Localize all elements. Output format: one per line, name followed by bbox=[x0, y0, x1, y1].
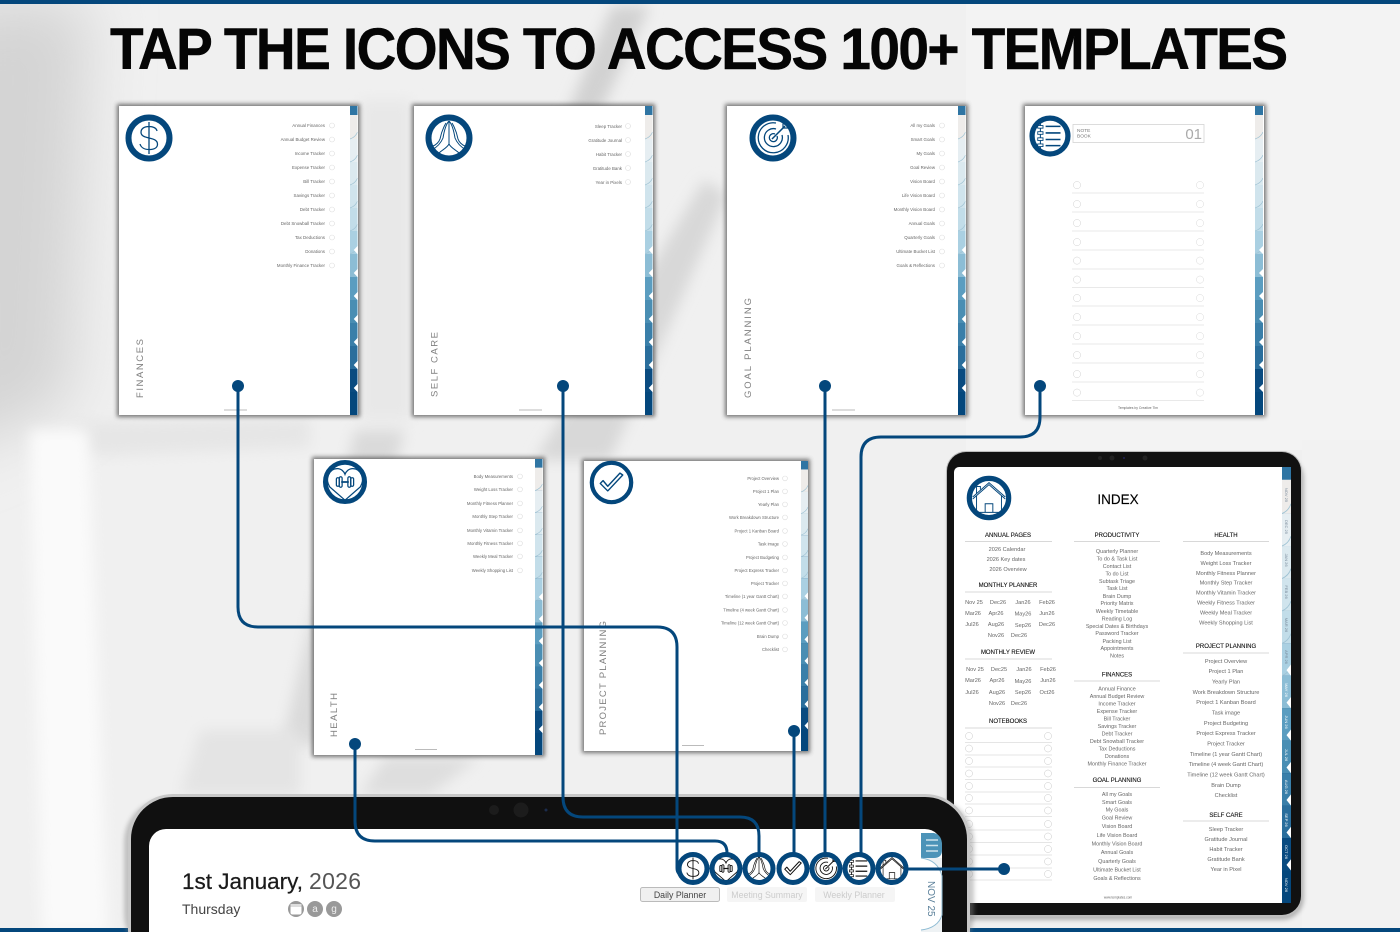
index column: middle: Quarterly Goals bbox=[1098, 859, 1136, 865]
index column: left: MONTHLY PLANNER bbox=[979, 583, 1038, 589]
list: project templates: Checklist bbox=[762, 647, 780, 652]
date icons: g bbox=[331, 904, 337, 915]
index column: middle: Task List bbox=[1107, 586, 1128, 592]
list: goal templates: Goal Review bbox=[910, 165, 936, 170]
index column: left: Jun26 bbox=[1039, 611, 1055, 617]
connector dots bbox=[232, 380, 1046, 875]
index column: middle: Income Tracker bbox=[1098, 702, 1136, 708]
panel: goal planning page bbox=[725, 104, 968, 417]
list: self care templates: Gratitude Journal bbox=[588, 138, 622, 143]
index column: middle: Life Vision Board bbox=[1097, 833, 1137, 839]
index column: middle: Subtask Triage bbox=[1099, 579, 1135, 585]
list: goal templates: Monthly Vision Board bbox=[894, 207, 936, 212]
index column: left: May26 bbox=[1015, 679, 1031, 685]
index column: right: HEALTH bbox=[1214, 533, 1238, 539]
index column: middle: www.templates.com bbox=[1104, 896, 1133, 900]
index column: right: Year in Pixel bbox=[1211, 867, 1241, 873]
connector: home icon to index bbox=[905, 868, 1004, 870]
index column: middle: Password Tracker bbox=[1095, 631, 1139, 637]
vertical heading: finances: FINANCES bbox=[135, 339, 146, 398]
index column: left: Apr26 bbox=[990, 678, 1004, 684]
button: weekly planner: Weekly Planner bbox=[823, 890, 885, 900]
list: project templates: Timeline (12 week Gantt Chart) bbox=[721, 620, 780, 626]
index column: right: Project Tracker bbox=[1207, 742, 1245, 748]
list: health templates: Monthly Fitness Tracker bbox=[467, 541, 514, 546]
index column: left: 2026 Calendar bbox=[989, 547, 1025, 553]
icon: heart dumbbell bbox=[325, 462, 365, 502]
list: goal templates: Quarterly Goals bbox=[904, 235, 936, 240]
index column: middle: Goal Review bbox=[1102, 816, 1132, 822]
list: project templates: Project Budgeting bbox=[746, 555, 780, 560]
index column: left: Jan26 bbox=[1016, 667, 1032, 673]
vertical heading: goal planning: GOAL PLANNING bbox=[743, 298, 754, 398]
index column: right: Weight Loss Tracker bbox=[1201, 561, 1252, 567]
panel: project planning page bbox=[582, 459, 810, 753]
list: finance templates: Income Tracker bbox=[295, 151, 326, 156]
index column: middle: Monthly Vision Board bbox=[1092, 842, 1142, 848]
index column: middle: Annual Budget Review bbox=[1090, 694, 1144, 700]
index column: middle: Savings Tracker bbox=[1098, 724, 1137, 730]
index column: middle: Debt Snowball Tracker bbox=[1090, 739, 1144, 745]
index tab strip: APR 26 bbox=[1284, 650, 1289, 665]
list: goal templates: Goals & Reflections bbox=[896, 263, 936, 268]
index column: middle: Priority Matrix bbox=[1101, 601, 1134, 607]
index column: middle: Annual Finance bbox=[1098, 686, 1136, 692]
index column: middle: All my Goals bbox=[1102, 792, 1132, 798]
index column: right bbox=[1183, 533, 1269, 873]
index tab strip: FEB 26 bbox=[1284, 585, 1289, 599]
index column: left: Dec26 bbox=[1039, 622, 1055, 628]
index column: left: Nov 25 bbox=[965, 600, 983, 606]
index column: left: Mar26 bbox=[965, 678, 981, 684]
index column: left: Feb26 bbox=[1039, 600, 1055, 606]
vertical heading: project planning: PROJECT PLANNING bbox=[598, 621, 609, 735]
list: goal templates: All my Goals bbox=[910, 123, 936, 128]
index column: left: Sep26 bbox=[1015, 690, 1031, 696]
list: goal templates bbox=[894, 123, 936, 268]
index column: right: Checklist bbox=[1215, 793, 1238, 799]
list: self care templates: Year in Pixels bbox=[596, 180, 623, 185]
notebook rows bbox=[1072, 182, 1204, 400]
icon: heart button bbox=[712, 854, 740, 883]
bottom border bar bbox=[0, 928, 1400, 932]
notebook header box: NOTE bbox=[1077, 128, 1090, 134]
index column: right: Habit Tracker bbox=[1209, 847, 1243, 853]
list: project templates: Brain Dump bbox=[757, 634, 780, 639]
title: TAP THE ICONS TO ACCESS 100+ TEMPLATES bbox=[110, 16, 1288, 82]
index column: middle: Notes bbox=[1110, 654, 1124, 660]
list: finance templates: Annual Finances bbox=[292, 123, 326, 128]
index column: right: Brain Dump bbox=[1211, 783, 1241, 789]
index column: middle: Debt Tracker bbox=[1102, 732, 1133, 738]
index column: left: Nov26 bbox=[988, 633, 1004, 639]
connector: health to heart icon bbox=[355, 744, 727, 858]
icon: check button bbox=[779, 854, 807, 883]
index column: middle: Contact List bbox=[1103, 564, 1132, 570]
list: finance templates: Expense Tracker bbox=[292, 165, 326, 170]
index column: left: Aug26 bbox=[988, 622, 1004, 628]
notebook header box: 01 bbox=[1185, 126, 1202, 143]
index column: left: Apr26 bbox=[989, 611, 1003, 617]
index column: right: Monthly Fitness Planner bbox=[1196, 571, 1256, 577]
index heading: INDEX bbox=[1097, 492, 1139, 507]
weekday: Thursday bbox=[182, 901, 240, 917]
panel: notebook page bbox=[1023, 104, 1266, 417]
list: project templates: Task image bbox=[758, 542, 780, 546]
list: finance templates: Bill Tracker bbox=[303, 179, 326, 184]
index column: right: Sleep Tracker bbox=[1209, 827, 1243, 833]
list: goal templates: Annual Goals bbox=[909, 221, 936, 226]
icon: home bbox=[969, 478, 1009, 518]
index tab strip: MAR 26 bbox=[1284, 618, 1289, 633]
list: project templates bbox=[721, 476, 780, 652]
index column: left: May26 bbox=[1015, 612, 1031, 618]
list: finance templates: Monthly Finance Tracker bbox=[277, 263, 326, 268]
index column: middle: To do & Task List bbox=[1097, 556, 1138, 562]
list: finance templates: Debt Snowball Tracker bbox=[281, 221, 326, 226]
index column: left: 2026 Key dates bbox=[987, 557, 1026, 563]
index column: left bbox=[965, 533, 1056, 880]
index column: left: Dec26 bbox=[990, 600, 1006, 606]
index column: left: NOTEBOOKS bbox=[989, 719, 1027, 725]
list: project templates: Project Express Tracker bbox=[735, 568, 780, 573]
list: project templates: Project 1 Plan bbox=[753, 489, 780, 494]
index column: middle: Reading Log bbox=[1102, 616, 1132, 622]
list: health templates: Body Measurements bbox=[474, 474, 513, 479]
button: meeting summary bbox=[727, 887, 807, 902]
list: project templates: Timeline (4 week Gantt Chart) bbox=[723, 608, 780, 612]
index column: right: Gratitude Bank bbox=[1207, 857, 1245, 863]
index column: middle: Quarterly Planner bbox=[1096, 549, 1138, 555]
index column: left: MONTHLY REVIEW bbox=[981, 650, 1035, 656]
list: health templates: Monthly Step Tracker bbox=[472, 514, 514, 519]
connector: self care to praying hands icon bbox=[563, 386, 759, 856]
list: project templates: Yearly Plan bbox=[758, 502, 780, 507]
list: goal templates: Life Vision Board bbox=[902, 193, 936, 198]
index tab strip: JAN 26 bbox=[1284, 553, 1289, 567]
icon: praying hands bbox=[428, 118, 470, 158]
date heading: 2026 bbox=[309, 868, 361, 894]
index column: left: ANNUAL PAGES bbox=[985, 533, 1031, 539]
index column: middle: Donations bbox=[1105, 754, 1129, 760]
icon: target bbox=[752, 118, 794, 158]
index column: middle: Special Dates & Birthdays bbox=[1086, 624, 1148, 630]
index column: right: Gratitude Journal bbox=[1205, 837, 1247, 843]
index column: right: Weekly Shopping List bbox=[1199, 620, 1253, 626]
panel: index tablet bbox=[946, 451, 1304, 920]
index column: left: Aug26 bbox=[989, 690, 1005, 696]
list: finance templates: Annual Budget Review bbox=[281, 137, 326, 142]
index tab strip: SEP 26 bbox=[1284, 813, 1289, 828]
icon: target button bbox=[812, 854, 840, 883]
index column: right: Project 1 Kanban Board bbox=[1196, 700, 1256, 706]
button: weekly planner bbox=[815, 887, 895, 902]
icon: notebook bbox=[1032, 118, 1068, 154]
panel: bottom planner tablet bbox=[124, 794, 974, 932]
index column: middle: GOAL PLANNING bbox=[1093, 778, 1142, 784]
index column: right: SELF CARE bbox=[1209, 813, 1243, 819]
list: health templates: Monthly Fitness Planner bbox=[467, 501, 514, 506]
index column: right: Project Express Tracker bbox=[1196, 731, 1256, 737]
date heading bbox=[182, 868, 361, 894]
side tab strip bbox=[921, 833, 942, 932]
index tab strip: JUL 26 bbox=[1284, 749, 1289, 762]
index column: right: Body Measurements bbox=[1200, 551, 1252, 557]
date icons: a bbox=[312, 904, 318, 915]
index column: right: Project Overview bbox=[1205, 659, 1248, 665]
list: self care templates: Habit Tracker bbox=[596, 152, 623, 157]
list: goal templates: Smart Goals bbox=[911, 137, 936, 142]
index column: middle: My Goals bbox=[1106, 808, 1129, 814]
index column: middle: Brain Dump bbox=[1103, 594, 1131, 600]
date icons bbox=[288, 901, 342, 917]
index column: left: 2026 Overview bbox=[989, 567, 1028, 573]
index column: left: Feb26 bbox=[1040, 667, 1056, 673]
index column: middle: To do List bbox=[1105, 572, 1129, 578]
index column: middle: Ultimate Bucket List bbox=[1093, 868, 1141, 874]
index column: left: Jun26 bbox=[1040, 678, 1056, 684]
list: goal templates: Vision Board bbox=[910, 179, 936, 184]
list: health templates bbox=[467, 474, 514, 573]
list: finance templates: Savings Tracker bbox=[294, 193, 326, 198]
index column: right: Weekly Fitness Tracker bbox=[1197, 600, 1255, 606]
list: health templates: Weekly Shopping List bbox=[472, 568, 514, 573]
notebook header box bbox=[1073, 124, 1204, 143]
icon: notebook button bbox=[845, 854, 873, 883]
index column: left: Jul26 bbox=[965, 690, 979, 696]
index column: middle: PRODUCTIVITY bbox=[1095, 533, 1139, 539]
index column: middle: Appointments bbox=[1101, 646, 1134, 652]
index column: right: PROJECT PLANNING bbox=[1196, 644, 1256, 650]
index column: middle: Goals & Reflections bbox=[1093, 876, 1141, 882]
index tab strip: OCT 26 bbox=[1284, 845, 1289, 860]
index tab strip bbox=[1282, 467, 1291, 903]
index column: right: Monthly Step Tracker bbox=[1200, 580, 1253, 586]
index tab strip: DEC 25 bbox=[1284, 520, 1289, 535]
index column: left: Nov 25 bbox=[966, 667, 984, 673]
index column: right: Project Budgeting bbox=[1204, 721, 1248, 727]
index tab strip: MAY 26 bbox=[1284, 683, 1289, 698]
list: health templates: Weekly Meal Tracker bbox=[473, 554, 514, 559]
index column: middle: Smart Goals bbox=[1102, 800, 1132, 806]
index column: right: Task image bbox=[1212, 710, 1240, 716]
index column: left: Oct26 bbox=[1040, 690, 1054, 696]
panel: self care page bbox=[412, 104, 655, 417]
list: project templates: Project 1 Kanban Board bbox=[735, 528, 780, 534]
list: project templates: Timeline (1 year Gantt Chart) bbox=[725, 594, 780, 599]
list: goal templates: Ultimate Bucket List bbox=[896, 249, 936, 254]
list: finance templates: Tax Deductions bbox=[295, 235, 326, 240]
index column: left: Dec26 bbox=[1011, 633, 1027, 639]
index tab strip: AUG 26 bbox=[1284, 780, 1289, 795]
notebook header box: BOOK bbox=[1077, 134, 1092, 140]
index column: right: Timeline (1 year Gantt Chart) bbox=[1190, 752, 1262, 758]
index column: right: Work Breakdown Structure bbox=[1193, 690, 1259, 696]
list: self care templates bbox=[588, 124, 623, 185]
index column: left: Jan26 bbox=[1015, 600, 1031, 606]
index tab strip: JUN 26 bbox=[1284, 715, 1289, 729]
list: project templates: Project Overview bbox=[747, 476, 780, 481]
index column: right: Yearly Plan bbox=[1212, 680, 1240, 686]
connector: notebook to notebook icon bbox=[861, 386, 1040, 856]
vertical heading: health: HEALTH bbox=[329, 693, 340, 737]
list: project templates: Work Breakdown Structure bbox=[729, 515, 780, 520]
index column: right: Weekly Meal Tracker bbox=[1200, 610, 1252, 616]
index tab strip: NOV 25 bbox=[1284, 488, 1289, 503]
index column: left: Dec26 bbox=[1011, 701, 1027, 707]
panel: finances page bbox=[117, 104, 360, 417]
button: daily planner: Daily Planner bbox=[654, 890, 706, 900]
list: finance templates: Donations bbox=[305, 249, 326, 254]
list: finance templates bbox=[277, 123, 326, 268]
list: finance templates: Debt Tracker bbox=[300, 207, 326, 212]
index column: middle: Vision Board bbox=[1102, 824, 1132, 830]
icon: home button bbox=[878, 854, 906, 883]
icon: dollar button bbox=[679, 854, 707, 883]
button: meeting summary: Meeting Summary bbox=[731, 890, 803, 900]
index column: middle: Bill Tracker bbox=[1104, 716, 1131, 722]
index column: left: Nov26 bbox=[989, 701, 1005, 707]
connector: finances to dollar icon bbox=[238, 386, 684, 875]
list: self care templates: Gratitude Bank bbox=[593, 166, 623, 171]
date heading: 1st January, bbox=[182, 869, 303, 894]
icon: check bbox=[592, 463, 631, 502]
notebook footer: Templates by Creative Tim bbox=[1118, 406, 1158, 410]
index column: right: Timeline (4 week Gantt Chart) bbox=[1189, 762, 1263, 768]
list: goal templates: My Goals bbox=[916, 151, 936, 156]
index column: left: Sep26 bbox=[1015, 623, 1031, 629]
index column: middle bbox=[1074, 533, 1160, 900]
index column: left: Dec25 bbox=[991, 667, 1007, 673]
index column: right: Timeline (12 week Gantt Chart) bbox=[1187, 772, 1265, 778]
index tab strip: NOV 26 bbox=[1284, 878, 1289, 893]
index column: left: Mar26 bbox=[965, 611, 981, 617]
index column: middle: Expense Tracker bbox=[1097, 709, 1137, 715]
index column: middle: Annual Goals bbox=[1101, 850, 1133, 856]
index column: middle: FINANCES bbox=[1102, 672, 1132, 678]
index column: right: Project 1 Plan bbox=[1209, 669, 1243, 675]
connector: goal planning to target icon bbox=[824, 386, 826, 856]
index column: middle: Packing List bbox=[1102, 639, 1132, 645]
index column: middle: Weekly Timetable bbox=[1096, 609, 1138, 615]
list: self care templates: Sleep Tracker bbox=[595, 124, 623, 129]
index column: left: Jul26 bbox=[965, 622, 979, 628]
index column: middle: Monthly Finance Tracker bbox=[1087, 762, 1147, 768]
list: health templates: Weight Loss Tracker bbox=[474, 487, 514, 492]
list: health templates: Monthly Vitamin Tracker bbox=[467, 528, 514, 533]
index column: right: Monthly Vitamin Tracker bbox=[1196, 590, 1256, 596]
index column: middle: Tax Deductions bbox=[1099, 746, 1136, 752]
button: daily planner bbox=[640, 888, 720, 902]
vertical heading: self care: SELF CARE bbox=[430, 332, 440, 397]
icon: hands button bbox=[745, 854, 773, 883]
side tab strip: NOV 25 bbox=[925, 881, 936, 917]
list: project templates: Project Tracker bbox=[751, 581, 780, 586]
icon: dollar bbox=[128, 118, 170, 158]
top border bar bbox=[0, 0, 1400, 4]
panel: health page bbox=[312, 457, 545, 757]
connector: project planning to check icon bbox=[792, 731, 796, 856]
